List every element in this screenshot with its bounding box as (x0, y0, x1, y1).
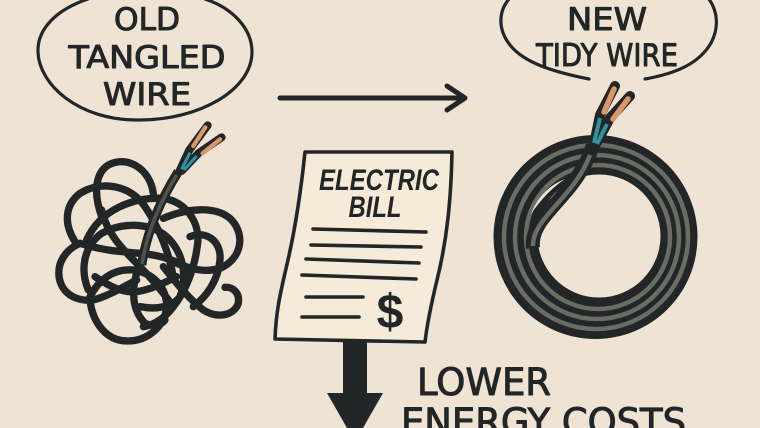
coil hole (538, 174, 660, 298)
speech bubble: new tidy wire (501, 0, 716, 79)
icon: electric bill document: BILL (348, 191, 402, 224)
speech bubble: new tidy wire: TIDY WIRE (535, 38, 678, 74)
text: lower energy costs: LOWER (417, 361, 551, 404)
icon: electric bill document (275, 152, 452, 342)
arrow: old wire to new wire (280, 86, 465, 110)
cable end (142, 172, 178, 265)
icon: tangled wire (59, 125, 240, 341)
cable lead (533, 145, 593, 248)
bill sheet (275, 152, 452, 342)
exposed conductors (180, 125, 208, 170)
speech bubble: old tangled wire (38, 0, 252, 120)
arrow: bill to lower energy costs (327, 342, 383, 428)
bill lines (302, 229, 426, 317)
speech bubble: new tidy wire: NEW (567, 2, 647, 38)
dollar sign: $ (377, 286, 404, 339)
coil (494, 135, 698, 339)
icon: tidy coiled wire (494, 86, 698, 339)
speech bubble: old tangled wire: OLD (114, 2, 180, 38)
bill title: ELECTRIC (319, 164, 440, 197)
speech bubble: old tangled wire: WIRE (103, 77, 191, 113)
exposed conductors (594, 86, 615, 144)
loop gap (531, 179, 565, 214)
speech bubble: old tangled wire: TANGLED (67, 40, 226, 76)
text: lower energy costs (401, 361, 686, 428)
tangled cable loops (59, 162, 240, 341)
